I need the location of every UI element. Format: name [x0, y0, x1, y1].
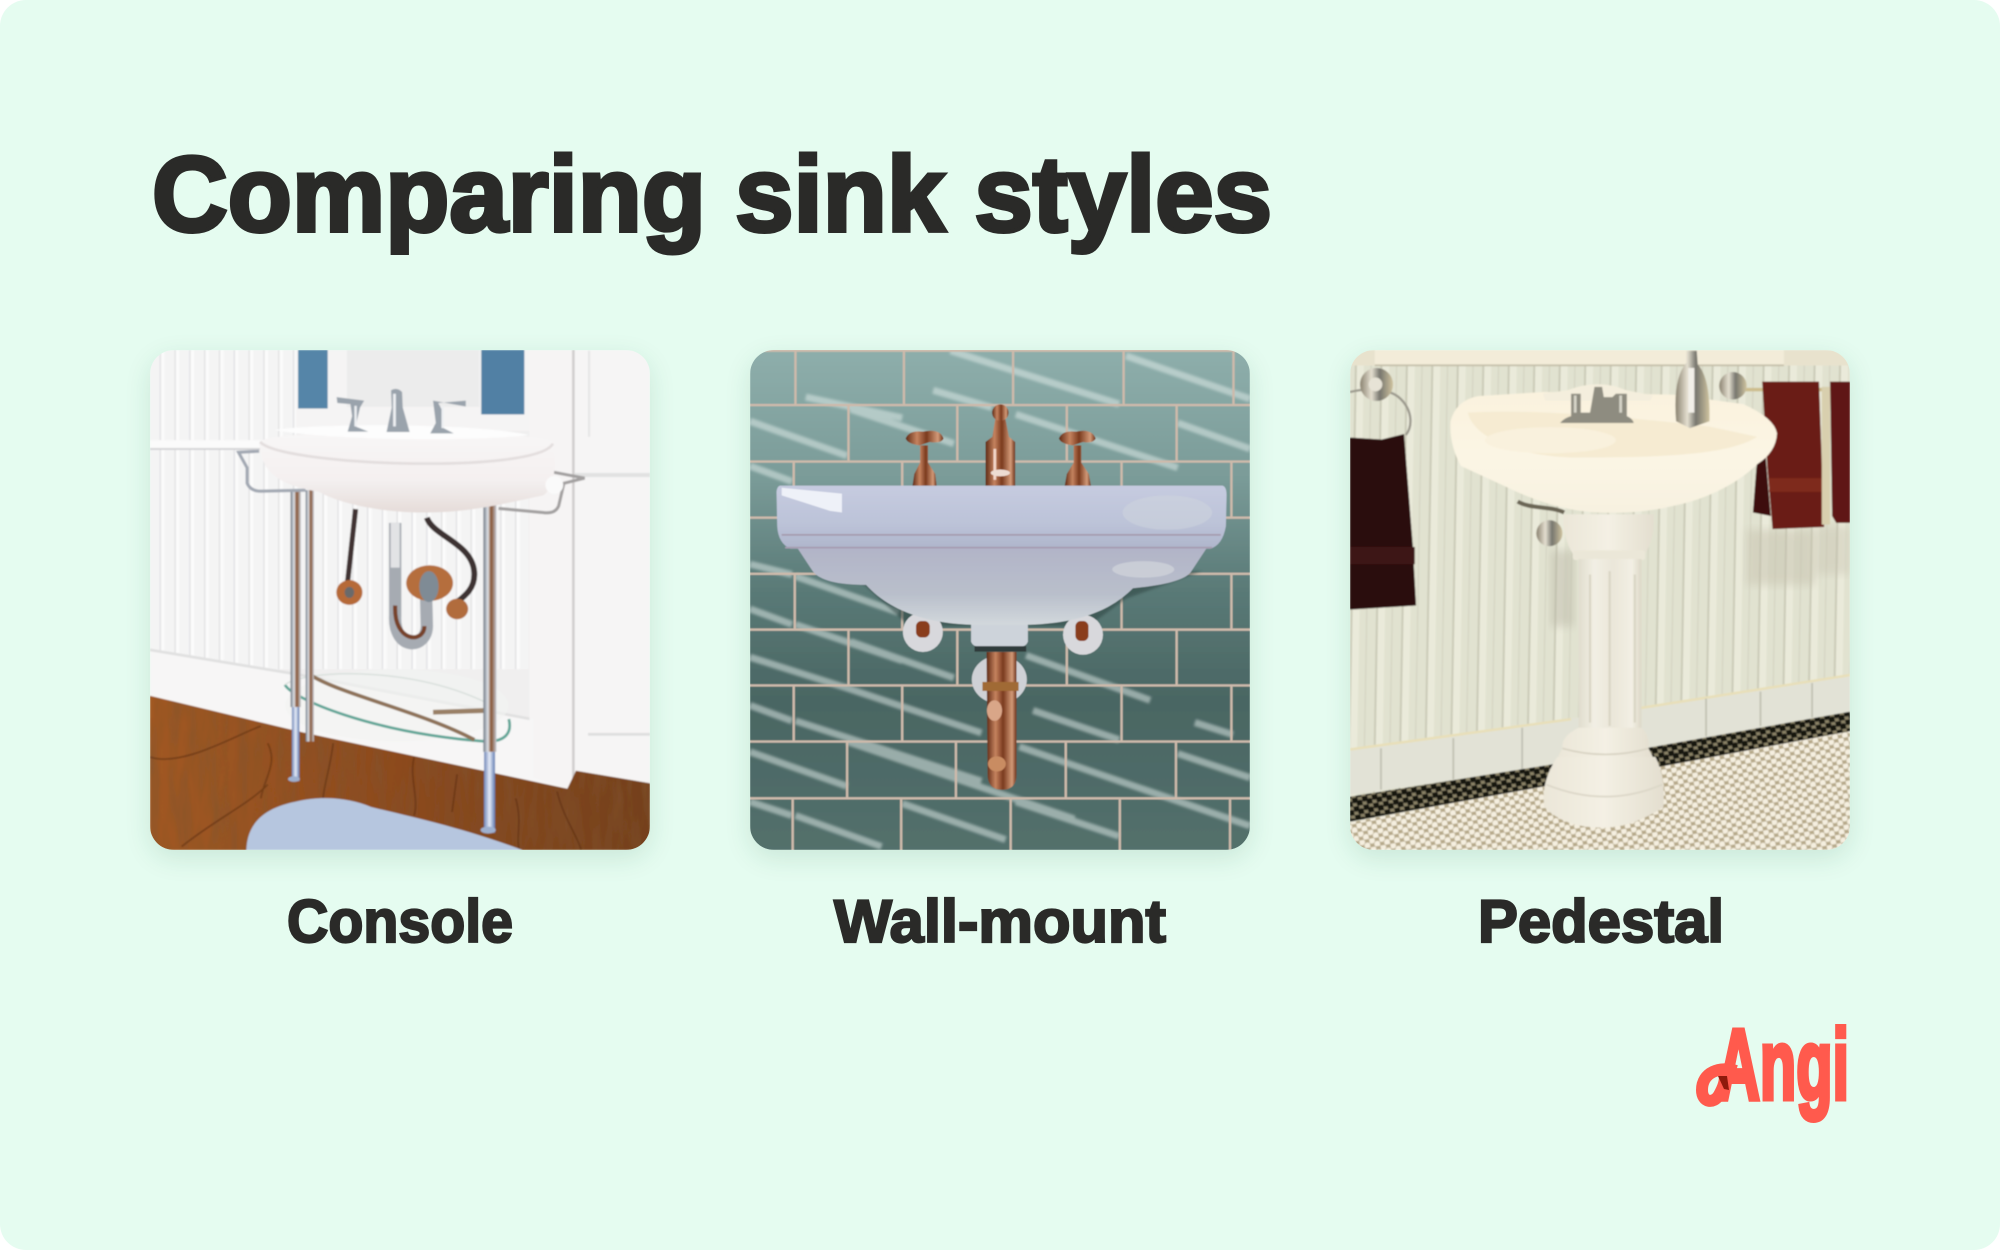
faucet	[337, 389, 466, 433]
title: Comparing sink styles	[152, 134, 1272, 254]
right towels and bar	[1731, 388, 1850, 391]
logo: Angi: Angi	[1717, 1009, 1849, 1121]
drain cup	[971, 623, 1028, 647]
soap dispenser	[1675, 351, 1710, 428]
back legs	[306, 490, 314, 742]
baseboard	[150, 650, 567, 788]
left towel and ring	[1350, 434, 1416, 610]
plumbing	[336, 509, 474, 643]
light streaks	[750, 351, 1250, 847]
faucet	[1543, 384, 1653, 401]
label: Wall-mount: Wall-mount	[834, 888, 1166, 955]
label: Console: Console	[287, 888, 513, 955]
tiles	[750, 350, 1250, 850]
panel: console sink photo	[150, 350, 650, 850]
black hex band	[1350, 712, 1850, 822]
sink basin	[1450, 392, 1777, 513]
pedestal	[1563, 514, 1654, 554]
rug	[246, 798, 523, 850]
wall	[150, 350, 650, 850]
floor	[150, 696, 650, 850]
panel: wall-mount sink photo	[750, 350, 1250, 850]
wall tile strip	[1350, 674, 1850, 795]
basin	[259, 432, 555, 513]
supply pipe	[1518, 502, 1564, 513]
mounts	[903, 612, 943, 652]
rim	[777, 486, 1227, 549]
trim and door	[529, 350, 574, 787]
glass shelf	[285, 669, 509, 742]
front legs	[290, 490, 301, 707]
panel: pedestal sink photo	[1350, 350, 1850, 850]
drain pipe	[987, 652, 1017, 790]
towel shadows	[1747, 530, 1816, 585]
faucets	[906, 404, 1096, 486]
logo: Angi	[1696, 1009, 1849, 1123]
hex floor	[1350, 731, 1850, 850]
shadow under sink	[813, 571, 1202, 626]
window recess	[296, 350, 534, 431]
wall	[1350, 350, 1850, 850]
label: Pedestal: Pedestal	[1478, 888, 1724, 955]
bowl	[797, 548, 1207, 625]
towel bars	[238, 451, 306, 491]
